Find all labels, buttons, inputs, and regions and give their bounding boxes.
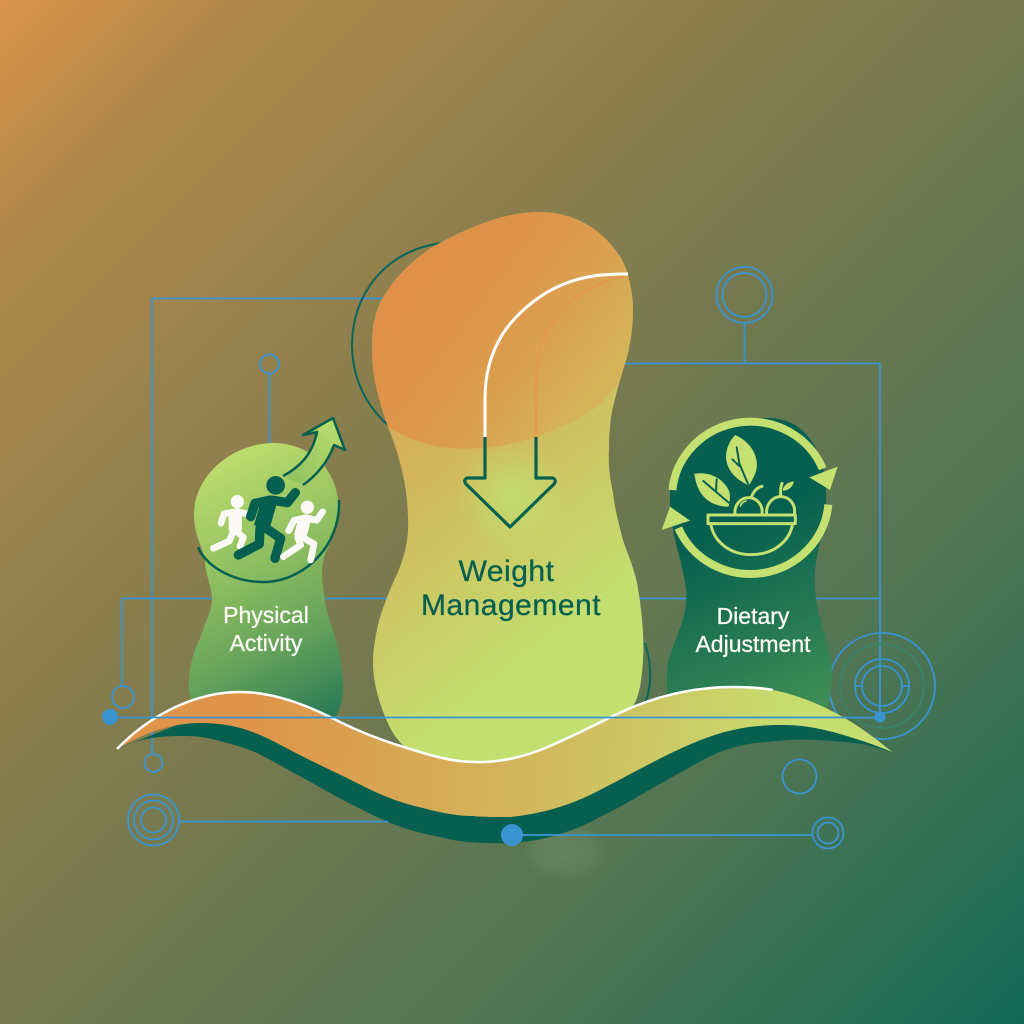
right target rings xyxy=(829,633,935,739)
top small node xyxy=(260,354,279,374)
runner: right white xyxy=(283,501,323,560)
bottom right double ring xyxy=(812,818,844,848)
connector network upper: blue lines behind blobs xyxy=(122,298,880,753)
food bowl with leaves and fruit xyxy=(694,435,795,555)
dietary adjustment blob xyxy=(667,418,832,730)
physical activity blob xyxy=(189,443,343,730)
label: physical activity: Physical xyxy=(223,602,309,628)
central blob xyxy=(372,212,643,775)
panel: weight management blob: Management xyxy=(421,589,601,622)
faint glow below wave xyxy=(523,822,607,882)
dark arc behind central blob xyxy=(352,243,442,425)
arrowhead outline xyxy=(465,437,555,527)
wave base xyxy=(117,687,892,843)
orange top lens xyxy=(372,212,633,448)
top right double ring xyxy=(716,267,772,323)
white wave highlight xyxy=(117,687,773,762)
upward arrow xyxy=(283,418,345,485)
label: dietary adjustment: Dietary xyxy=(717,603,790,629)
coloured wave band xyxy=(117,687,892,817)
panel: physical activity: Activity xyxy=(230,630,303,656)
open circle right xyxy=(782,760,816,794)
central highlight xyxy=(457,442,567,552)
panel: dietary adjustment xyxy=(662,418,838,730)
runner: left white xyxy=(213,495,248,548)
concentric target left xyxy=(128,794,179,846)
orange inner curve xyxy=(536,275,628,437)
left node upper xyxy=(112,686,134,708)
bottom left line xyxy=(180,820,388,822)
runner: centre dark xyxy=(238,476,295,558)
panel: physical activity xyxy=(189,418,345,730)
circular arrows xyxy=(672,422,828,574)
bottom centre line xyxy=(512,834,812,836)
blue node dots xyxy=(102,709,886,846)
connector network front xyxy=(110,267,880,848)
icon: cycle ring with food bowl xyxy=(662,422,838,574)
label: weight management: Weight xyxy=(459,555,555,588)
main horizontal line xyxy=(110,716,880,718)
panel: dietary adjustment: Adjustment xyxy=(695,631,811,657)
small dark arc right of central blob xyxy=(645,643,650,703)
left node lower xyxy=(144,754,162,772)
arrowheads xyxy=(662,467,838,530)
runners icon xyxy=(213,476,323,560)
panel: weight management blob xyxy=(372,212,644,761)
physical activity ring arc xyxy=(198,500,339,582)
white outer curve xyxy=(485,274,628,437)
dark wave shadow xyxy=(117,700,892,843)
curved down arrow xyxy=(465,274,628,527)
